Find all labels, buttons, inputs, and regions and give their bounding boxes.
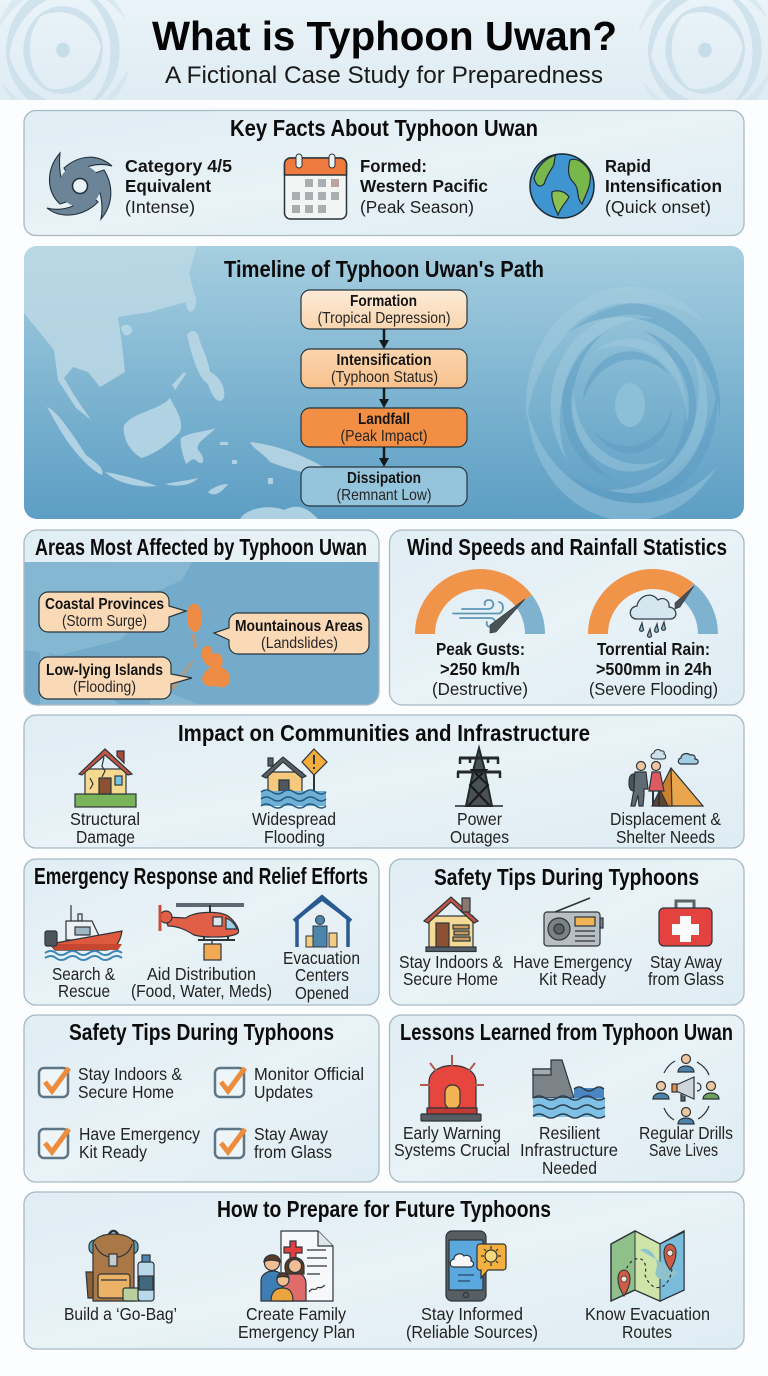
text: stay away: from Glass <box>648 969 724 989</box>
step: intensification <box>301 349 467 388</box>
arrow <box>383 388 385 401</box>
step: formation: Formation <box>350 293 417 310</box>
panel: timeline <box>24 246 744 519</box>
icon: evacuation map <box>611 1231 684 1301</box>
text: search rescue <box>52 964 115 1001</box>
check: away from glass <box>215 1124 332 1162</box>
icon: go-bag <box>86 1231 154 1301</box>
check: emergency kit: Kit Ready <box>79 1142 147 1162</box>
callout: mountainous <box>214 613 369 654</box>
icon: flooding <box>261 749 327 808</box>
text: formed: Western Pacific <box>360 176 488 196</box>
text: power outages <box>450 809 509 847</box>
text: category <box>125 156 232 217</box>
text: gusts: (Destructive) <box>432 679 528 699</box>
text: displacement: Displacement & <box>610 809 721 829</box>
text: rain: Torrential Rain: <box>597 639 710 659</box>
heading: prepare: How to Prepare for Future Typhoons <box>217 1196 551 1222</box>
panel: emergency response <box>24 859 379 1005</box>
gauge: rain <box>598 579 708 637</box>
text: stay indoors <box>399 952 503 989</box>
text: go-bag: Build a ‘Go-Bag’ <box>64 1304 177 1324</box>
text: flooding: Flooding <box>264 827 325 847</box>
text: stay away <box>648 952 724 989</box>
text: resilient infrastructure: Resilient <box>539 1123 600 1143</box>
text: formed <box>360 156 488 217</box>
text: stay informed: Stay Informed <box>421 1304 523 1324</box>
text: power outages: Power <box>457 809 502 829</box>
text: search rescue: Search & <box>52 964 115 984</box>
text: rapid: Rapid <box>605 156 651 176</box>
text: evacuation routes <box>585 1304 710 1342</box>
icon: rescue boat <box>45 905 122 960</box>
text: regular drills: Save Lives <box>649 1140 718 1160</box>
text: stay informed <box>406 1304 538 1342</box>
icon: right swirl <box>639 0 768 100</box>
step: dissipation: Dissipation <box>347 470 421 487</box>
text: rain: >500mm in 24h <box>596 659 712 679</box>
text: flooding: Widespread <box>252 809 336 829</box>
text: resilient infrastructure <box>520 1123 618 1178</box>
check: monitor updates: Monitor Official <box>254 1064 364 1084</box>
step: dissipation <box>301 467 467 506</box>
arrow head <box>379 458 389 467</box>
text: aid distribution: (Food, Water, Meds) <box>131 981 272 1001</box>
callout: coastal: (Storm Surge) <box>62 613 147 630</box>
map: Philippines in orange <box>170 604 230 690</box>
text: structural damage: Damage <box>76 827 135 847</box>
arrow head <box>379 340 389 349</box>
heading: safety tips: Safety Tips During Typhoons <box>434 864 699 890</box>
gauge: gusts <box>425 579 535 634</box>
text: rapid <box>605 156 722 217</box>
arrow head <box>379 399 389 408</box>
icon: damaged house <box>75 749 136 807</box>
arrow <box>383 447 385 460</box>
text: family plan <box>238 1304 355 1342</box>
panel: impact <box>24 715 744 848</box>
swirl: storm graphic <box>526 303 720 519</box>
text: displacement <box>610 809 721 847</box>
step: landfall <box>301 408 467 447</box>
needle <box>490 599 525 633</box>
panel: safety checklist <box>24 1015 379 1182</box>
text: evacuation centers: Centers <box>295 965 349 985</box>
icon: first aid kit <box>659 901 712 946</box>
text: rain: (Severe Flooding) <box>589 679 718 699</box>
text: structural damage <box>70 809 140 847</box>
text: stay away: Stay Away <box>650 952 722 972</box>
text: emergency kit <box>513 952 632 989</box>
icon: wind <box>453 600 503 627</box>
text: aid distribution <box>131 964 272 1001</box>
callout: mountainous: Mountainous Areas <box>235 618 363 635</box>
check: monitor updates: Updates <box>254 1082 313 1102</box>
callout: low-lying: Low-lying Islands <box>46 662 163 679</box>
icon: helicopter <box>160 905 244 960</box>
check: away from glass: Stay Away <box>254 1124 328 1144</box>
icon: power tower <box>455 748 503 806</box>
text: search rescue: Rescue <box>58 981 110 1001</box>
text: rapid: (Quick onset) <box>605 197 711 217</box>
text: formed: (Peak Season) <box>360 197 474 217</box>
callout: low-lying: (Flooding) <box>73 679 136 696</box>
check: stay indoors <box>39 1064 182 1102</box>
arrow <box>383 329 385 342</box>
text: early warning <box>394 1123 510 1160</box>
icon: evacuation shelter <box>294 897 351 947</box>
heading: timeline: Timeline of Typhoon Uwan's Path <box>224 256 544 282</box>
step: landfall: (Peak Impact) <box>340 428 428 445</box>
icon: rain cloud <box>630 595 676 637</box>
text: category: Equivalent <box>125 176 211 196</box>
icon: left swirl <box>0 0 129 100</box>
icon: radio <box>544 898 603 946</box>
text: aid distribution: Aid Distribution <box>147 964 256 984</box>
text: family plan: Create Family <box>246 1304 346 1324</box>
callout: low-lying <box>39 657 192 699</box>
header banner <box>0 0 768 100</box>
text: evacuation routes: Know Evacuation <box>585 1304 710 1324</box>
title: What is Typhoon Uwan? <box>152 13 617 59</box>
step: formation: (Tropical Depression) <box>318 310 450 327</box>
icon: drills community <box>653 1054 719 1124</box>
text: gusts: >250 km/h <box>440 659 520 679</box>
text: regular drills <box>639 1123 733 1160</box>
step: landfall: Landfall <box>358 411 410 428</box>
check: stay indoors: Secure Home <box>78 1082 174 1102</box>
panel: safety tips icons <box>390 859 744 1005</box>
text: evacuation routes: Routes <box>622 1322 672 1342</box>
icon: calendar <box>284 154 346 219</box>
panel: prepare <box>24 1192 744 1349</box>
text: emergency kit: Have Emergency <box>513 952 632 972</box>
text: family plan: Emergency Plan <box>238 1322 355 1342</box>
callout: mountainous: (Landslides) <box>261 635 338 652</box>
icon: cyclone <box>47 153 112 219</box>
text: regular drills: Regular Drills <box>639 1123 733 1143</box>
text: resilient infrastructure: Needed <box>542 1158 597 1178</box>
icon: resilient dam <box>533 1060 605 1118</box>
text: gusts: Peak Gusts: <box>436 639 525 659</box>
heading: impact: Impact on Communities and Infrastructure <box>178 720 590 746</box>
text: evacuation centers: Opened <box>295 983 349 1003</box>
icon: displaced people and tent <box>629 750 703 806</box>
map background <box>24 562 379 705</box>
icon: warning siren <box>420 1055 484 1121</box>
map: land masses <box>24 246 332 519</box>
text: structural damage: Structural <box>70 809 140 829</box>
text: power outages: Outages <box>450 827 509 847</box>
needle <box>675 586 694 609</box>
callout: coastal <box>39 592 186 632</box>
text: emergency kit: Kit Ready <box>539 969 606 989</box>
text: rapid: Intensification <box>605 176 722 196</box>
heading: emergency: Emergency Response and Relief Efforts <box>34 863 368 889</box>
heading: key facts: Key Facts About Typhoon Uwan <box>230 115 538 141</box>
icon: family plan <box>261 1231 333 1301</box>
text: stay informed: (Reliable Sources) <box>406 1322 538 1342</box>
text: evacuation centers <box>283 948 360 1003</box>
step: formation <box>301 290 467 329</box>
panel: wind and rain <box>390 530 744 705</box>
text: early warning: Early Warning <box>403 1123 501 1143</box>
callout: coastal: Coastal Provinces <box>45 596 164 613</box>
panel: lessons learned <box>390 1015 744 1182</box>
text: rain <box>589 639 718 699</box>
text: flooding <box>252 809 336 847</box>
text: resilient infrastructure: Infrastructure <box>520 1140 618 1160</box>
map: faint land <box>24 562 200 705</box>
text: category: (Intense) <box>125 197 195 217</box>
icon: secure home <box>424 897 478 952</box>
step: intensification: (Typhoon Status) <box>331 369 438 386</box>
step: dissipation: (Remnant Low) <box>336 487 432 504</box>
heading: areas: Areas Most Affected by Typhoon Uwan <box>35 534 367 560</box>
check: stay indoors: Stay Indoors & <box>78 1064 182 1084</box>
step: intensification: Intensification <box>336 352 432 369</box>
check: away from glass: from Glass <box>254 1142 332 1162</box>
check: emergency kit <box>39 1124 200 1162</box>
icon: globe <box>530 154 594 218</box>
panel: areas affected <box>24 530 379 705</box>
subtitle: A Fictional Case Study for Preparedness <box>165 62 603 89</box>
check: emergency kit: Have Emergency <box>79 1124 200 1144</box>
text: category: Category 4/5 <box>125 156 232 176</box>
text: evacuation centers: Evacuation <box>283 948 360 968</box>
text: stay indoors: Stay Indoors & <box>399 952 503 972</box>
text: gusts <box>432 639 528 699</box>
text: stay indoors: Secure Home <box>403 969 498 989</box>
panel: key facts <box>24 110 744 236</box>
check: monitor updates <box>215 1064 364 1102</box>
text: early warning: Systems Crucial <box>394 1140 510 1160</box>
text: formed: Formed: <box>360 156 427 176</box>
icon: phone weather <box>446 1231 506 1301</box>
text: displacement: Shelter Needs <box>616 827 715 847</box>
heading: checklist: Safety Tips During Typhoons <box>69 1019 334 1045</box>
